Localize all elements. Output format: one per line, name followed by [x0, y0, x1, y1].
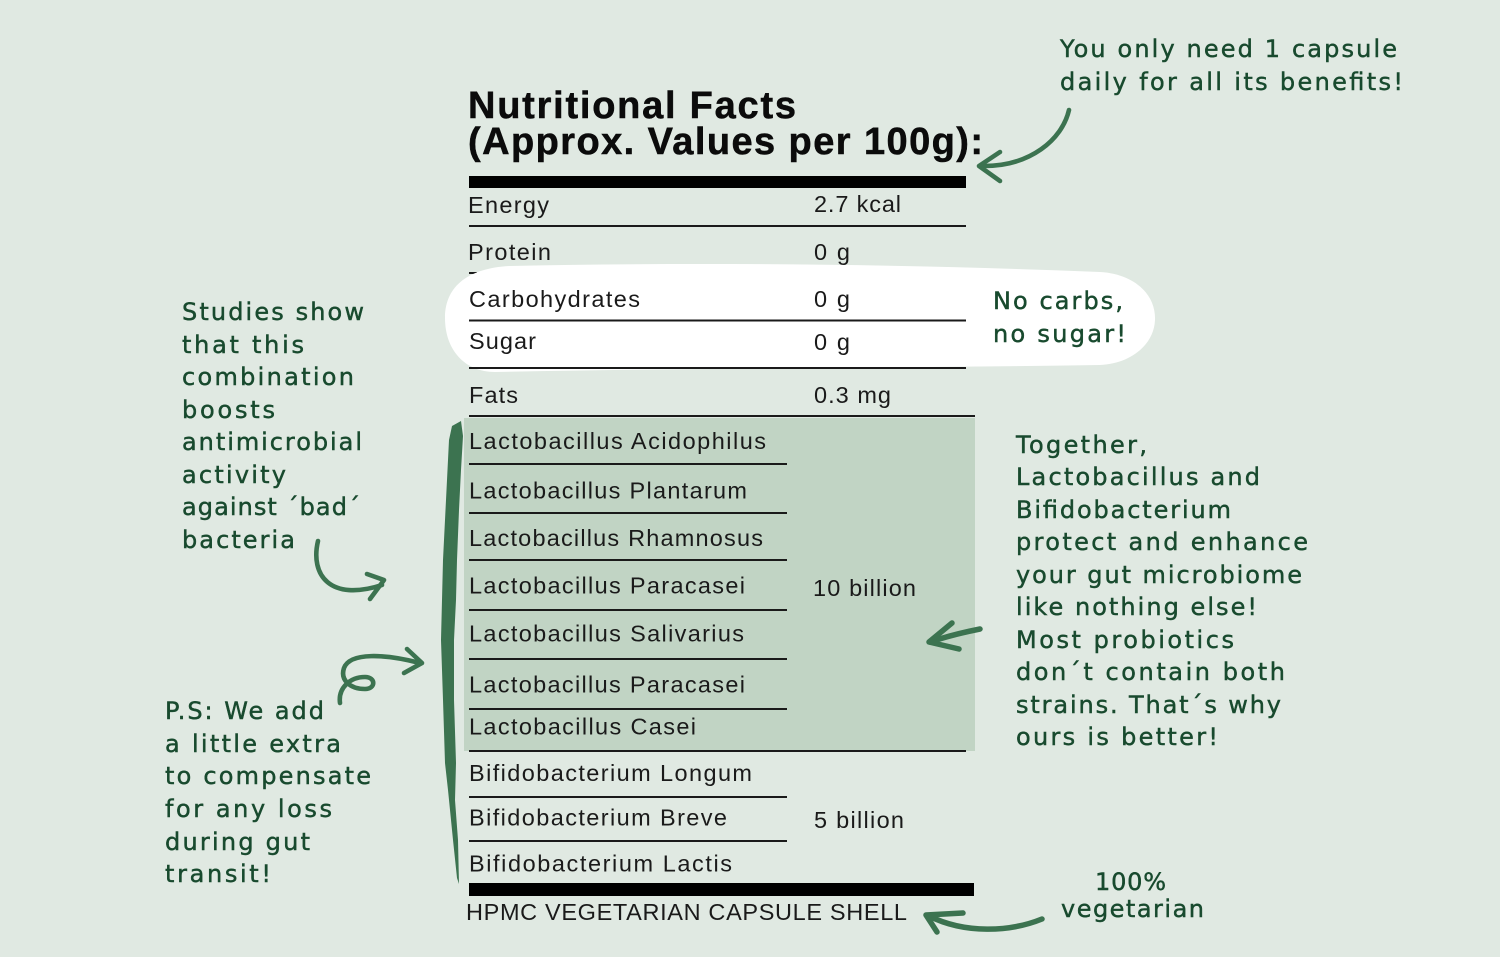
- row: energy: 2.7 kcal: [814, 191, 901, 217]
- lactobacillus strains list: [469, 428, 966, 752]
- note: studies show: activity: [182, 461, 286, 489]
- row: protein: Protein: [468, 239, 551, 265]
- note: studies show: boosts: [182, 396, 275, 424]
- callout: no carbs, no sugar: [993, 287, 1126, 348]
- note: P.S.: to compensate: [165, 762, 371, 790]
- note: together: Lactobacillus and: [1016, 463, 1260, 491]
- brush stroke bracket: [441, 421, 463, 884]
- row: fats: Fats: [469, 382, 518, 408]
- note: together: [1015, 431, 1308, 751]
- note: studies show: against ´bad´: [182, 493, 360, 521]
- row: protein: [468, 239, 850, 274]
- note: together: strains. That´s why: [1016, 691, 1281, 719]
- note: together: Together,: [1015, 431, 1147, 459]
- bottom black bar: [469, 883, 974, 896]
- note: together: your gut microbiome: [1016, 561, 1302, 589]
- bifidobacterium strains list: Bifidobacterium Longum: [469, 760, 752, 786]
- top black bar: [469, 176, 966, 188]
- highlighted lactobacillus block: [464, 418, 975, 751]
- value: 10 billion: 10 billion: [813, 575, 916, 601]
- note: studies show: antimicrobial: [182, 428, 362, 456]
- note: together: Bifidobacterium: [1016, 496, 1231, 524]
- note: together: like nothing else!: [1016, 593, 1257, 621]
- note: one capsule: [1059, 35, 1403, 96]
- lactobacillus strains list: Lactobacillus Salivarius: [469, 620, 744, 646]
- note: studies show: [182, 298, 364, 554]
- heading: nutritional facts: (Approx. Values per 100g):: [468, 121, 983, 163]
- row: sugar: 0 g: [814, 329, 850, 355]
- value: 5 billion: 5 billion: [814, 807, 904, 833]
- lactobacillus strains list: Lactobacillus Casei: [469, 714, 696, 740]
- note: one capsule: You only need 1 capsule: [1059, 35, 1397, 63]
- white highlight blob: [445, 264, 1155, 372]
- note: studies show: bacteria: [182, 526, 295, 554]
- note: together: protect and enhance: [1016, 528, 1308, 556]
- row: carbohydrates: 0 g: [814, 286, 850, 312]
- lactobacillus strains list: Lactobacillus Rhamnosus: [469, 525, 763, 551]
- note: P.S.: P.S: We add: [165, 697, 324, 725]
- note: P.S.: transit!: [165, 860, 271, 888]
- callout: no carbs, no sugar: No carbs,: [993, 287, 1123, 315]
- note: 100% vegetarian: 100%: [1095, 868, 1166, 896]
- note: studies show: that this: [182, 331, 304, 359]
- lactobacillus strains list: Lactobacillus Plantarum: [469, 478, 747, 504]
- note: P.S.: during gut: [165, 828, 310, 856]
- capsule shell note: HPMC VEGETARIAN CAPSULE SHELL: [466, 899, 907, 925]
- bifidobacterium strains list: Bifidobacterium Lactis: [469, 850, 732, 876]
- arrow: P.S. to brush stroke: [340, 649, 422, 703]
- heading: nutritional facts: [468, 85, 983, 163]
- note: P.S.: a little extra: [165, 730, 341, 758]
- lactobacillus strains list: Lactobacillus Paracasei: [469, 672, 745, 698]
- row: sugar: [469, 328, 966, 369]
- note: together: Most probiotics: [1016, 626, 1234, 654]
- note: 100% vegetarian: vegetarian: [1061, 895, 1204, 923]
- lactobacillus strains list: Lactobacillus Paracasei: [469, 572, 745, 598]
- note: together: ours is better!: [1016, 723, 1218, 751]
- note: studies show: Studies show: [182, 298, 364, 326]
- row: fats: 0.3 mg: [814, 382, 891, 408]
- bifidobacterium strains list: Bifidobacterium Breve: [469, 804, 727, 830]
- arrow: together to block: [929, 623, 980, 649]
- note: one capsule: daily for all its benefits!: [1060, 68, 1403, 96]
- note: P.S.: for any loss: [165, 795, 332, 823]
- row: energy: Energy: [468, 192, 549, 218]
- note: studies show: combination: [182, 363, 354, 391]
- arrow: capsule to heading: [979, 110, 1069, 181]
- row: protein: 0 g: [814, 239, 850, 265]
- row: carbohydrates: Carbohydrates: [469, 286, 640, 312]
- note: P.S.: [165, 697, 371, 888]
- callout: no carbs, no sugar: no sugar!: [993, 320, 1126, 348]
- note: 100% vegetarian: [1061, 868, 1204, 923]
- row: carbohydrates: [469, 286, 966, 322]
- arrow: studies to list: [316, 541, 384, 599]
- note: together: don´t contain both: [1016, 658, 1285, 686]
- arrow: vegetarian to capsule shell: [926, 913, 1042, 932]
- heading: nutritional facts: Nutritional Facts: [468, 85, 796, 127]
- bifidobacterium strains list: [469, 760, 787, 876]
- row: energy: [468, 191, 966, 227]
- lactobacillus strains list: Lactobacillus Acidophilus: [469, 428, 766, 454]
- row: sugar: Sugar: [469, 328, 536, 354]
- row: fats: [469, 382, 975, 417]
